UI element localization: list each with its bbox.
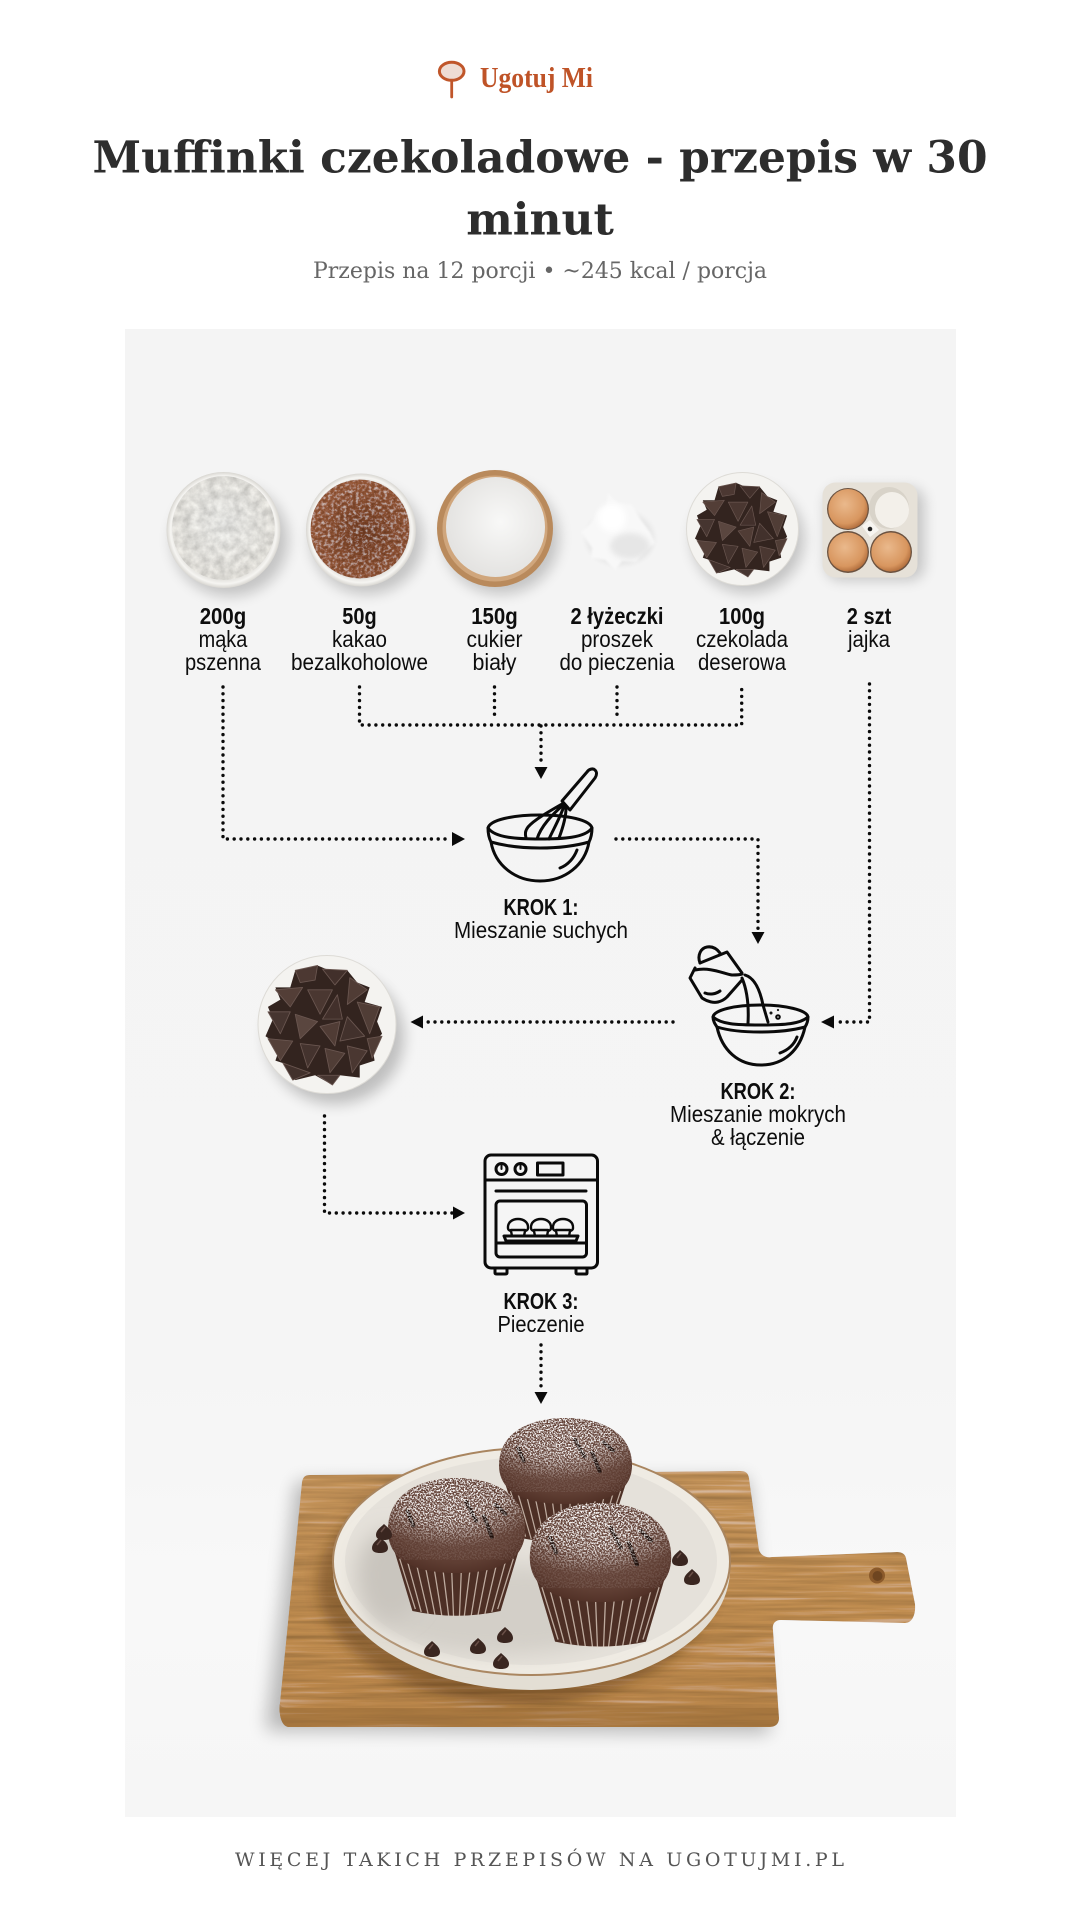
panel: recipe flow: [125, 329, 956, 1817]
label: baking powder: 2 łyżeczki: [570, 603, 664, 629]
label: cocoa: bezalkoholowe: [291, 649, 428, 675]
label: baking powder: [560, 603, 675, 675]
label: chocolate: 100g: [719, 603, 765, 629]
step 2 label: [670, 1078, 846, 1150]
logo wordmark: Ugotuj Mi: [480, 63, 593, 94]
title: Muffinki czekoladowe - przepis w 30: [92, 132, 988, 184]
label: chocolate: deserowa: [698, 649, 786, 675]
finished muffins on board: [266, 1416, 915, 1733]
label: chocolate: [696, 603, 788, 675]
step 2 label: & łączenie: [711, 1124, 805, 1150]
label: flour: mąka: [199, 626, 248, 652]
muffin: left: [386, 1476, 527, 1617]
label: baking powder: proszek: [581, 626, 653, 652]
footer: WIĘCEJ TAKICH PRZEPISÓW NA UGOTUJMI.PL: [235, 1848, 846, 1871]
ingredient: cocoa bowl: [306, 474, 423, 594]
label: baking powder: do pieczenia: [560, 649, 675, 675]
label: cocoa: [291, 603, 428, 675]
icon: pouring jug and bowl: [690, 947, 808, 1065]
wooden board: [279, 1471, 915, 1727]
arrow: chocolate to oven: [324, 1116, 465, 1220]
arrow: flour to step 1: [223, 687, 465, 846]
label: eggs: [847, 603, 892, 652]
step 3 label: KROK 3:: [504, 1288, 578, 1314]
plate: [318, 1448, 730, 1704]
label: flour: 200g: [200, 603, 246, 629]
ingredient: baking powder: [581, 493, 655, 570]
arrow: step 2 to chocolate: [410, 1016, 673, 1028]
ingredient: egg carton: [822, 482, 924, 580]
label: flour: pszenna: [185, 649, 261, 675]
label: sugar: biały: [472, 649, 517, 675]
arrow: dry ingredients merge to step 1: [360, 687, 742, 779]
ingredient: flour bowl: [166, 472, 288, 596]
title: minut: [466, 194, 614, 246]
label: chocolate: czekolada: [696, 626, 788, 652]
step 1 label: [454, 894, 628, 943]
label: sugar: [466, 603, 523, 675]
ingredient: sugar in wooden bowl: [437, 470, 559, 594]
step 3 label: Pieczenie: [498, 1311, 584, 1337]
board shadow: [266, 1478, 770, 1733]
icon: whisk in bowl: [488, 769, 596, 881]
ingredient labels: [185, 603, 892, 675]
label: flour: [185, 603, 261, 675]
subtitle: Przepis na 12 porcji • ~245 kcal / porcja: [313, 259, 767, 284]
logo: [439, 62, 593, 97]
step 3 label: [498, 1288, 584, 1337]
label: sugar: 150g: [471, 603, 518, 629]
arrow: oven to muffins: [534, 1345, 548, 1404]
step 1 label: KROK 1:: [504, 894, 578, 920]
label: cocoa: 50g: [342, 603, 377, 629]
step 2 label: KROK 2:: [720, 1078, 796, 1104]
label: eggs: jajka: [847, 626, 890, 652]
label: sugar: cukier: [466, 626, 523, 652]
label: cocoa: kakao: [332, 626, 387, 652]
icon: spoon logo: [439, 62, 464, 97]
step 2 label: Mieszanie mokrych: [670, 1101, 846, 1127]
step 1 label: Mieszanie suchych: [454, 917, 628, 943]
arrow: eggs to step 2: [821, 684, 870, 1028]
muffin: back: [497, 1416, 634, 1544]
icon: oven: [485, 1155, 598, 1274]
chocolate bowl step: [258, 956, 404, 1104]
arrow: step 1 to step 2: [616, 839, 764, 944]
chocolate chips: [372, 1524, 700, 1669]
label: eggs: 2 szt: [847, 603, 892, 629]
ingredient: chocolate bowl: [686, 472, 804, 593]
muffin: right: [528, 1501, 673, 1648]
